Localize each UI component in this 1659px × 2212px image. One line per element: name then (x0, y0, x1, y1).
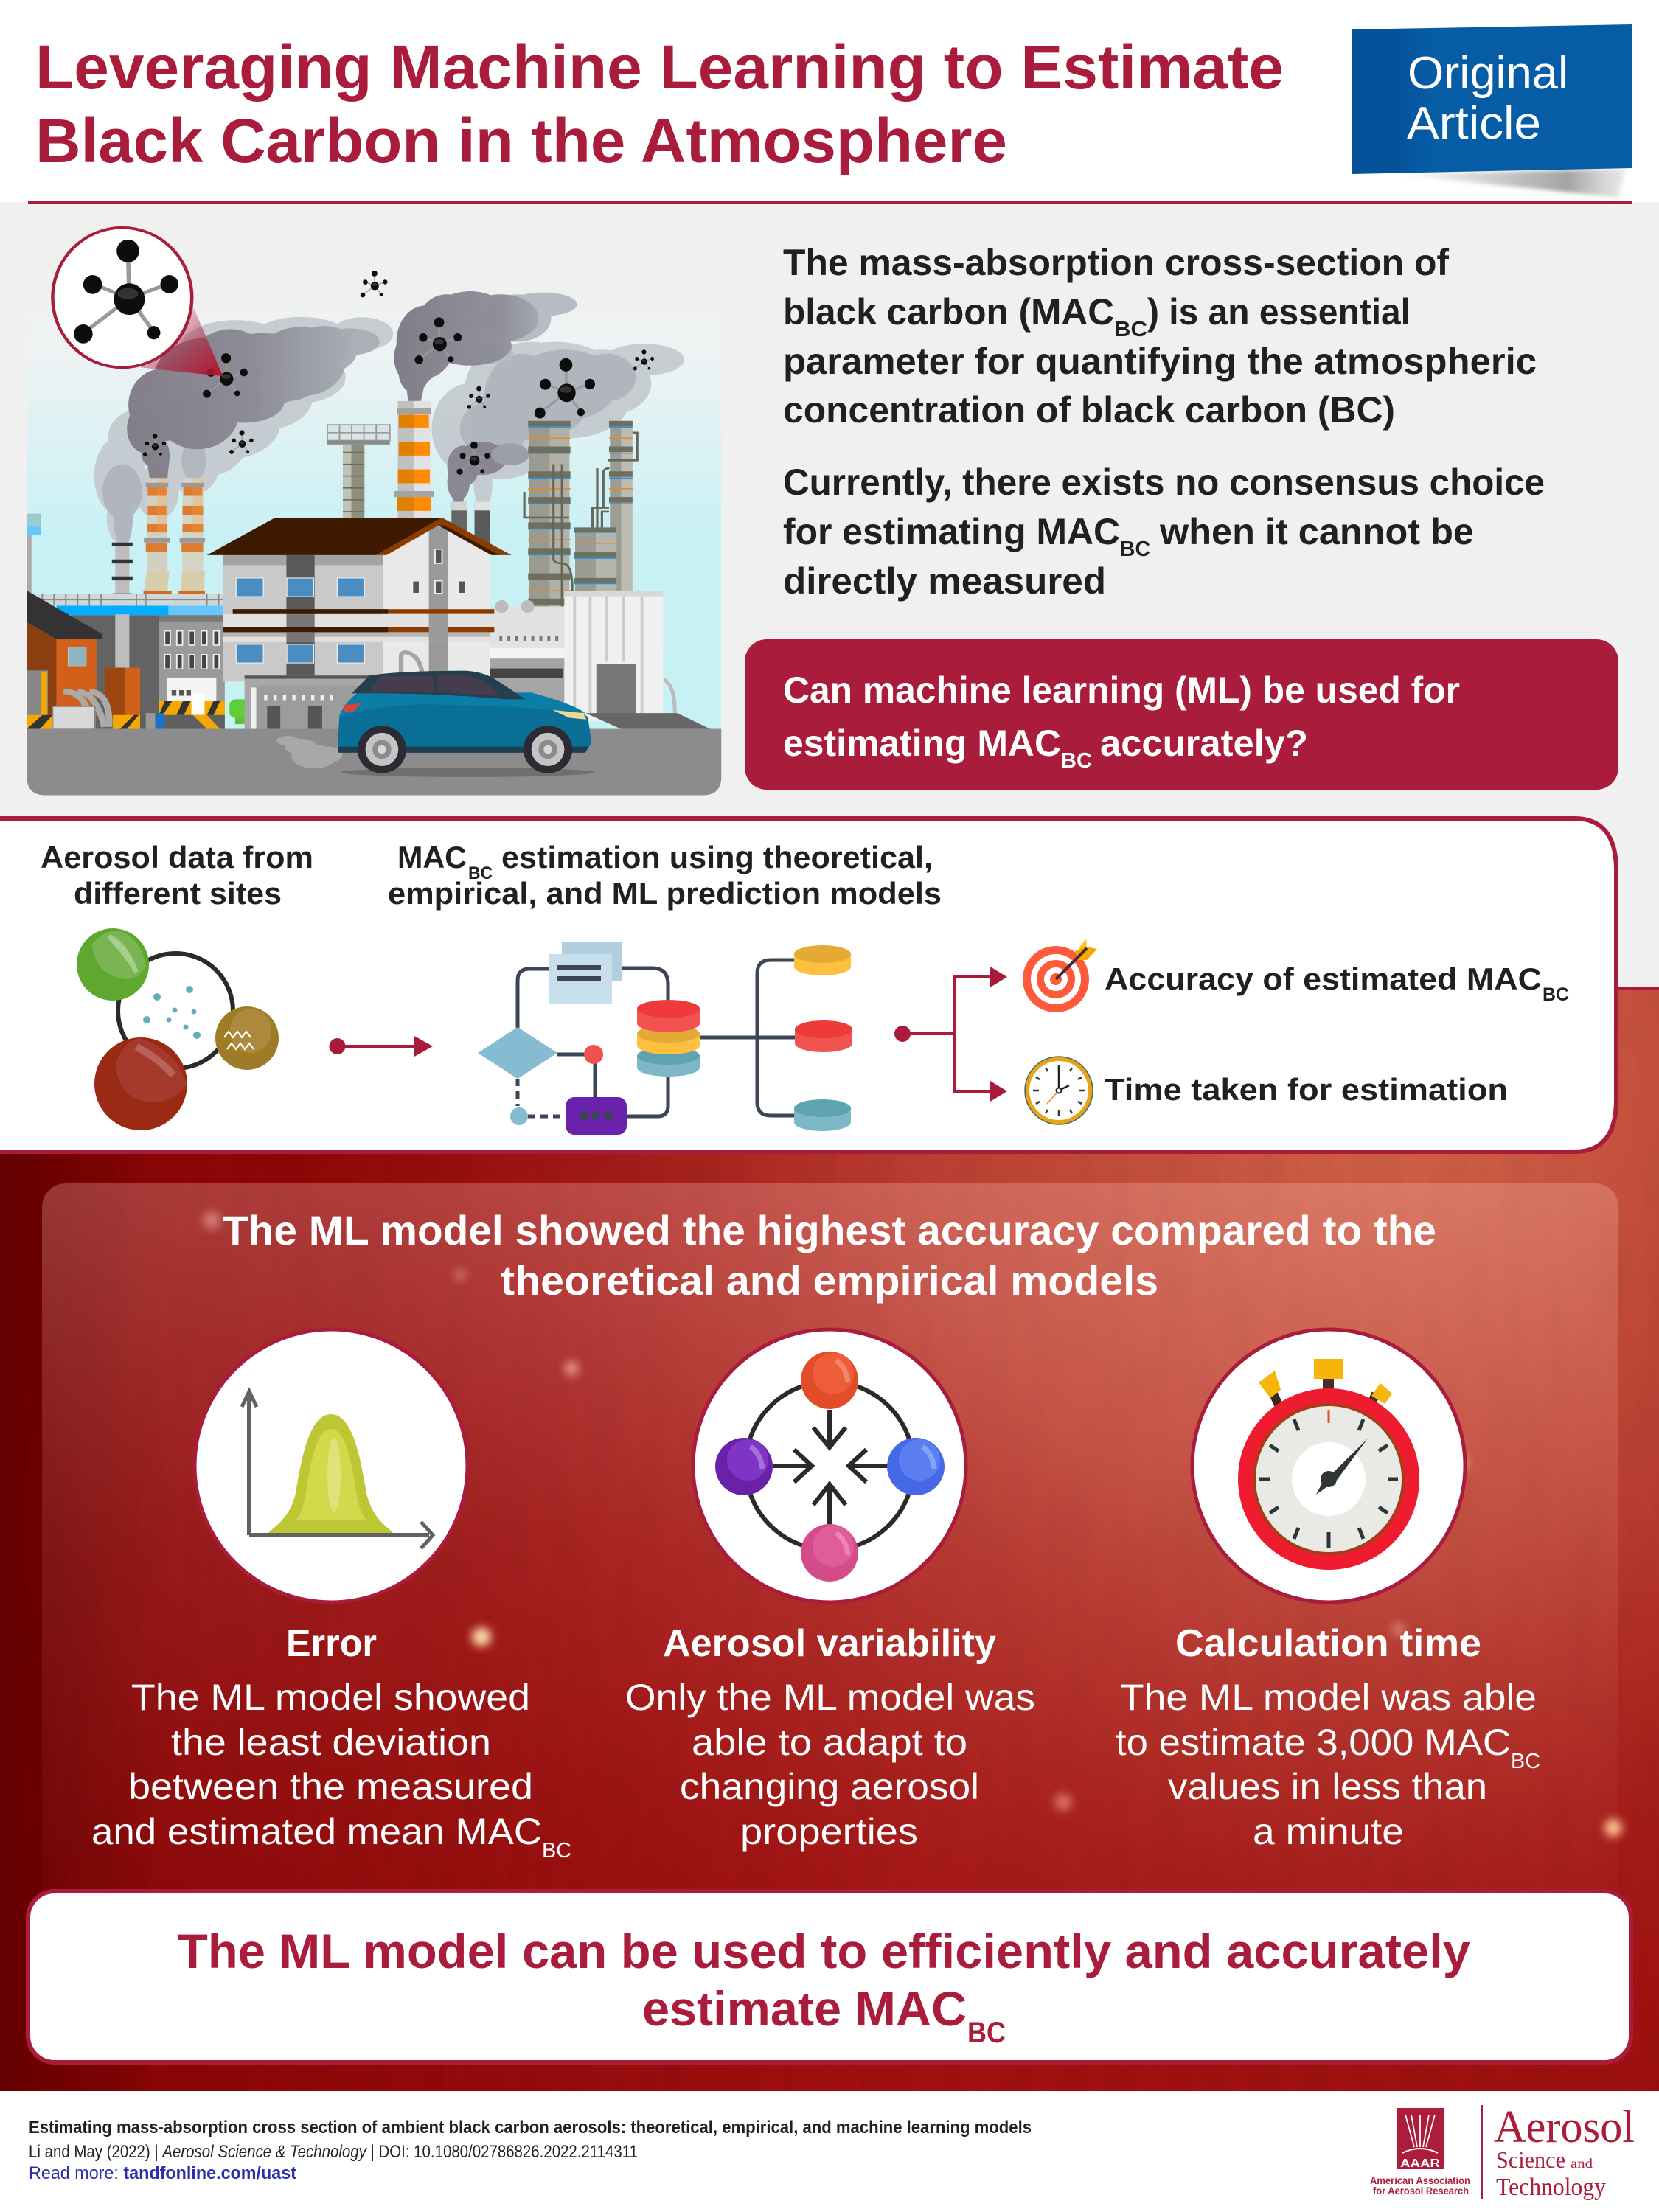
question callout: BC (1061, 749, 1092, 773)
icon: stopwatch (1192, 1329, 1465, 1602)
question callout: Can machine learning (ML) be used for (783, 669, 1460, 711)
accuracy label: BC (1543, 984, 1569, 1005)
icon: error distribution (195, 1329, 467, 1602)
main factory building (207, 518, 512, 729)
result: calculation time: Calculation time (1175, 1622, 1481, 1665)
results heading: The ML model showed the highest accuracy compared to the (223, 1207, 1436, 1253)
result: error: The ML model showed (131, 1677, 530, 1718)
result: error: Error (286, 1622, 377, 1665)
small molecules (143, 271, 654, 475)
heading: estimation models (388, 840, 942, 911)
citation: Read more: tandfonline.com/uast (29, 2163, 296, 2183)
conclusion box (28, 1891, 1631, 2062)
conclusion box: estimate MAC (642, 1981, 967, 2036)
logo: journal name: Aerosol (1494, 2102, 1635, 2152)
heading: aerosol data (41, 840, 313, 911)
result: calculation time: BC (1511, 1750, 1540, 1773)
result: calculation time: to estimate 3,000 MAC (1116, 1722, 1511, 1763)
magnifier pointer (140, 299, 223, 376)
citation (29, 2118, 1032, 2183)
citation: Li and May (2022) | Aerosol Science & Technology | DOI: 10.1080/02786826.2022.2114311 (29, 2142, 638, 2162)
result: error (91, 1622, 571, 1863)
heading: estimation models: empirical, and ML prediction models (388, 876, 942, 911)
grey upper band (0, 202, 1659, 988)
result: aerosol variability: Only the ML model was (625, 1677, 1035, 1718)
icon: aerosol variability (693, 1329, 966, 1602)
left factory (27, 514, 251, 730)
logo: AAAR: for Aerosol Research (1373, 2185, 1469, 2197)
intro paragraph 2: for estimating MAC (783, 511, 1120, 552)
question callout (745, 639, 1618, 790)
title: Leveraging Machine Learning to Estimate (35, 32, 1284, 102)
result: aerosol variability: Aerosol variability (663, 1622, 996, 1665)
heading: estimation models: MAC (397, 840, 467, 874)
result: error: and estimated mean MAC (91, 1811, 542, 1852)
intro paragraph 2: directly measured (783, 560, 1106, 602)
result: calculation time: a minute (1253, 1811, 1404, 1852)
result: error: the least deviation (171, 1722, 491, 1763)
citation: Estimating mass-absorption cross section of ambient black carbon aerosols: theoretical, empirical, and machine learning models (29, 2118, 1032, 2138)
results heading: theoretical and empirical models (501, 1257, 1158, 1304)
heading: estimation models: estimation using theoretical, (501, 840, 933, 874)
title: Black Carbon in the Atmosphere (35, 106, 1007, 175)
icon: model flow diagram (478, 942, 852, 1135)
question callout: accurately? (1100, 723, 1308, 764)
intro paragraph 2: when it cannot be (1159, 511, 1474, 552)
accuracy label: Accuracy of estimated MAC (1105, 961, 1542, 996)
badge: original article (1352, 24, 1632, 198)
magnifier: black carbon molecule (52, 228, 192, 367)
intro paragraph 1: ) is an essential (1147, 291, 1411, 333)
illustration: industrial scene with smoke and car (27, 228, 721, 796)
heading: aerosol data: different sites (74, 876, 282, 911)
panel: results (42, 1183, 1622, 1913)
logo: AAAR: AAAR (1400, 2157, 1441, 2170)
smoke plumes (94, 291, 684, 547)
right white building (490, 591, 710, 730)
red textured background (0, 987, 1659, 2091)
logo: journal name: Science (1496, 2146, 1565, 2173)
panel: methods workflow (0, 818, 1616, 1152)
intro paragraph 2: Currently, there exists no consensus choice (783, 462, 1545, 503)
intro paragraph 2 (783, 462, 1545, 602)
icon: target (1023, 939, 1097, 1012)
badge: original article: Article (1407, 98, 1541, 149)
intro paragraph 2: BC (1120, 538, 1150, 561)
conclusion box: The ML model can be used to efficiently and accurately (178, 1924, 1470, 1978)
icon: aerosol particles (77, 928, 279, 1130)
intro paragraph 1: BC (1114, 318, 1147, 341)
title (35, 32, 1284, 175)
logo: AAAR: American Association (1370, 2174, 1470, 2186)
intro paragraph 1: concentration of black carbon (BC) (783, 389, 1395, 431)
result: calculation time (1116, 1622, 1540, 1852)
sparkles (203, 1211, 1622, 1837)
intro paragraph 1: The mass-absorption cross-section of (783, 242, 1449, 283)
time label: Time taken for estimation (1105, 1072, 1508, 1107)
badge: original article: Original (1408, 48, 1568, 99)
refinery silos (524, 421, 637, 608)
result: error: BC (542, 1839, 571, 1863)
results heading (223, 1207, 1436, 1304)
logo: journal name: Technology (1496, 2174, 1606, 2201)
intro paragraph 1: black carbon (MAC (783, 291, 1114, 333)
result: error: between the measured (128, 1766, 533, 1807)
arrow: data to models (329, 1036, 433, 1057)
intro paragraph 1 (783, 242, 1537, 431)
logo: journal name: and (1571, 2156, 1593, 2171)
result: calculation time: values in less than (1168, 1766, 1487, 1807)
car exhaust (276, 736, 342, 768)
intro paragraph 1: parameter for quantifying the atmospheric (783, 341, 1537, 382)
result: aerosol variability: changing aerosol (680, 1766, 979, 1807)
result: aerosol variability: able to adapt to (692, 1722, 967, 1763)
car (338, 671, 595, 777)
question callout: estimating MAC (783, 723, 1061, 764)
result: calculation time: The ML model was able (1120, 1677, 1537, 1718)
logo: AAAR (1370, 2108, 1470, 2197)
conclusion box: BC (967, 2017, 1006, 2049)
chimneys (112, 401, 490, 594)
icon: clock (1025, 1057, 1093, 1124)
result: aerosol variability (625, 1622, 1035, 1852)
logo: journal name (1494, 2102, 1635, 2201)
ground (27, 729, 721, 796)
heading: aerosol data: Aerosol data from (41, 840, 313, 874)
result: aerosol variability: properties (740, 1811, 918, 1852)
heading: estimation models: BC (468, 863, 493, 883)
arrow: models to outputs (894, 967, 1007, 1102)
footer (0, 2091, 1659, 2212)
